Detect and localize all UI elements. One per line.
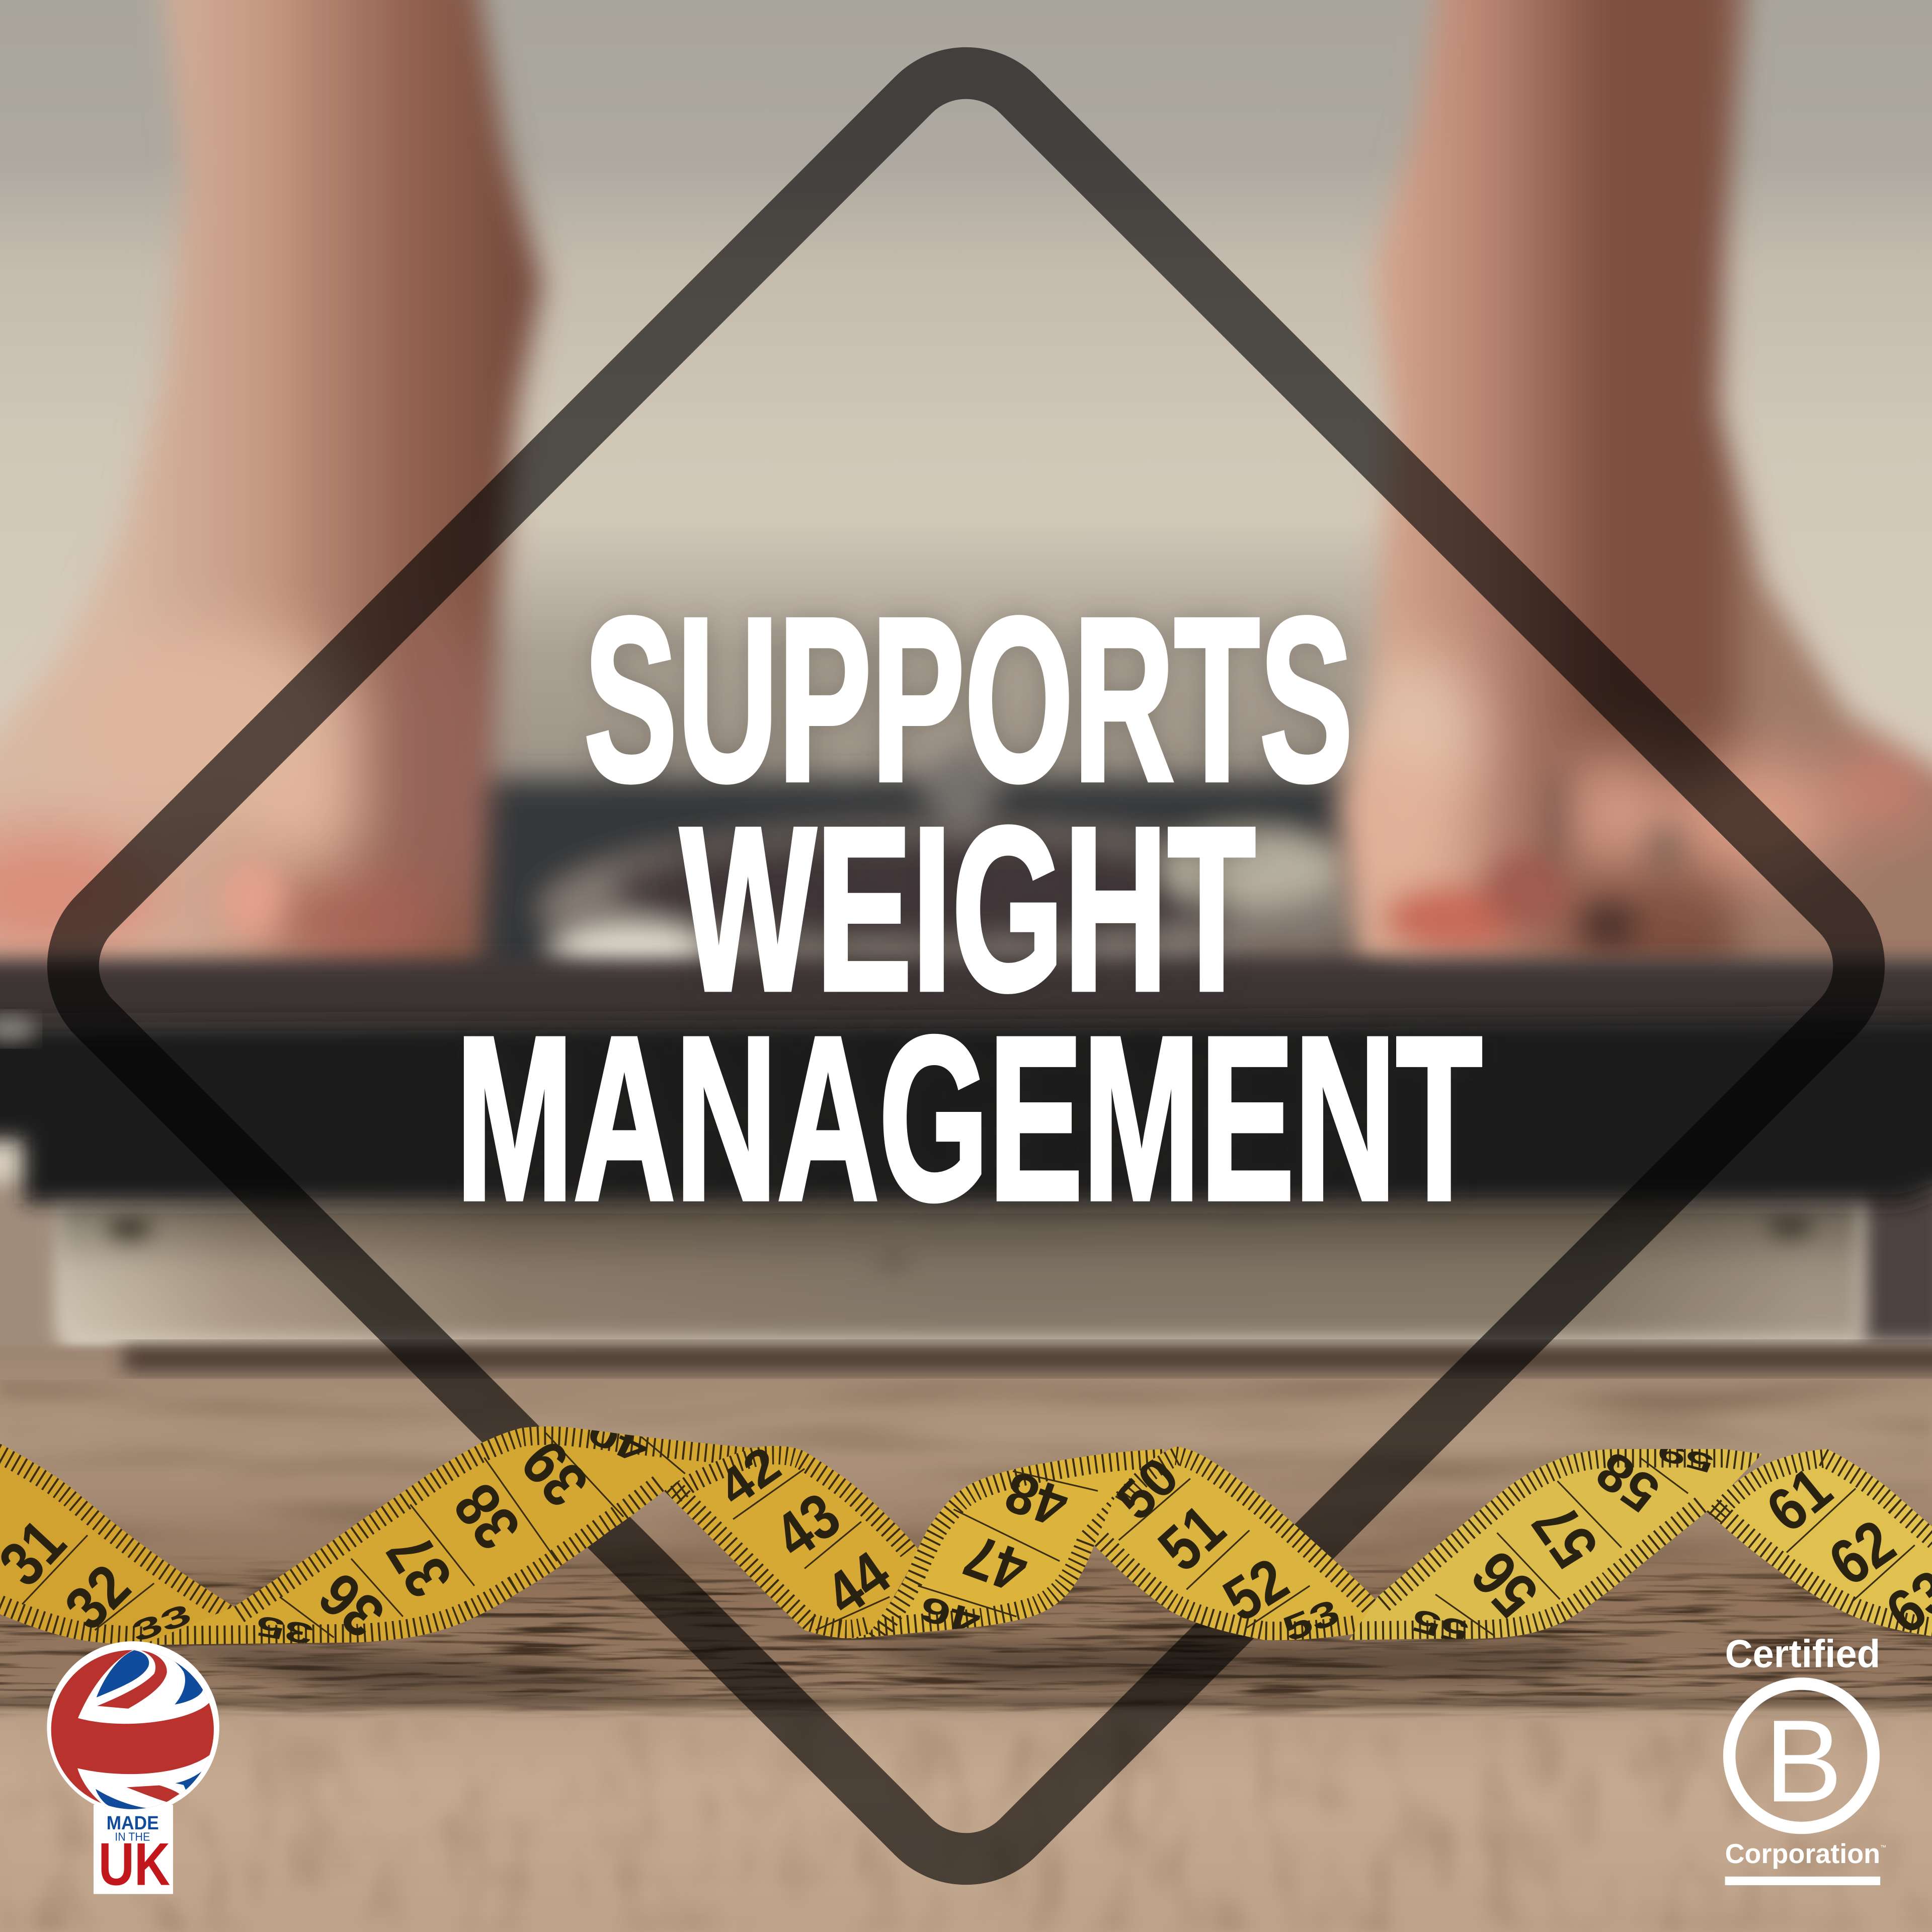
tape segment 50 to 53: 51 (1145, 1491, 1238, 1585)
photo: black scale body (0, 1015, 1932, 1204)
tape segment 42 to 44: 44 (814, 1539, 902, 1629)
tape segment 35 to 40: 39 (508, 1427, 602, 1519)
tape segment 61 to 63: 61 (1754, 1455, 1844, 1545)
tape segment 31 to 33 (0, 1429, 247, 1651)
photo: scale shadow (123, 1347, 1932, 1372)
tape segment 35 to 40 (135, 1411, 776, 1651)
trademark mark: ™ (1880, 1844, 1886, 1851)
photo: wall behind scale base edges (0, 1183, 1932, 1367)
tape segment 55 to 59: 59 (1654, 1436, 1717, 1479)
tape segment 42 to 44 (653, 1435, 930, 1651)
tape segment 46 to 48: 48 (997, 1459, 1075, 1540)
photo: scale edge highlight (0, 1016, 37, 1041)
tape segment 31 to 33: 33 (128, 1597, 195, 1648)
tape segment 46 to 48: 47 (955, 1521, 1036, 1605)
headline: Supports Weight Management (456, 570, 1482, 1249)
B Corp ring (1729, 1684, 1874, 1828)
badge text: UK (99, 1831, 170, 1898)
photo: blurred wood grain behind the tape (0, 1380, 1932, 1589)
tape segment 50 to 53: 52 (1212, 1545, 1300, 1635)
headline glow (466, 570, 1482, 1249)
photo: tape shadow (148, 1644, 1651, 1698)
badge text (99, 1813, 170, 1898)
headline: Supports Weight Management: SUPPORTS (584, 570, 1353, 830)
photo: scale top and dial (456, 752, 1392, 993)
tape segment 55 to 59: 58 (1585, 1440, 1670, 1524)
tape segment 35 to 40: 40 (582, 1411, 653, 1472)
tape segment 42 to 44: 42 (708, 1436, 790, 1517)
photo: wall shade between feet (444, 518, 1405, 813)
B Corp word: Certified: Certified (1725, 1631, 1880, 1675)
B Corp letter: B (1764, 1696, 1842, 1826)
tape segment 46 to 48: 46 (916, 1588, 985, 1642)
badge globe (42, 1641, 223, 1894)
logo: Certified B Corporation (1725, 1631, 1886, 1885)
tape segment 61 to 63 (1701, 1441, 1932, 1647)
photo: soft floor blotches (0, 1720, 1932, 1932)
B Corp word: Corporation: Corporation (1725, 1838, 1880, 1869)
tape segment 55 to 59: 57 (1518, 1490, 1612, 1580)
tape segment 35 to 40: 38 (440, 1471, 534, 1562)
tape segment 31 to 33: 32 (52, 1552, 143, 1643)
B Corp underline bar (1725, 1877, 1880, 1885)
tape segment 50 to 53: 53 (1277, 1591, 1345, 1649)
photo: floor (0, 1345, 1932, 1932)
badge text: IN THE (115, 1830, 150, 1843)
photo: white scale base (58, 1183, 1861, 1338)
tape segment 35 to 40: 36 (306, 1560, 396, 1651)
tape segment 55 to 59: 56 (1458, 1538, 1552, 1631)
headline: Supports Weight Management: WEIGHT (680, 779, 1256, 1039)
tape segment 42 to 44: 43 (762, 1479, 853, 1572)
tape segment 50 to 53: 50 (1104, 1445, 1190, 1532)
photo: sharp wood grain (0, 1553, 1932, 1720)
measuring tape (0, 1411, 1932, 1651)
photo: dark band under toes (0, 958, 1932, 1032)
logo: Made in the UK badge (42, 1641, 223, 1898)
headline glow: SUPPORTS (588, 570, 1348, 830)
headline glow: WEIGHT (679, 779, 1256, 1039)
tape segment 55 to 59: 55 (1408, 1601, 1473, 1651)
tape segment 55 to 59 (1343, 1436, 1768, 1651)
tape segment 35 to 40: 35 (254, 1609, 315, 1651)
photo: left leg and foot (0, 0, 542, 986)
badge text: MADE (107, 1813, 159, 1834)
photo: dark floorboard seam (0, 1698, 1932, 1707)
tape segment 61 to 63: 62 (1817, 1506, 1907, 1599)
tape segment 46 to 48 (844, 1441, 1171, 1645)
photo: right leg and foot (1337, 0, 1932, 974)
tape segment 50 to 53 (1084, 1441, 1386, 1651)
tape segment 35 to 40: 37 (373, 1520, 466, 1609)
